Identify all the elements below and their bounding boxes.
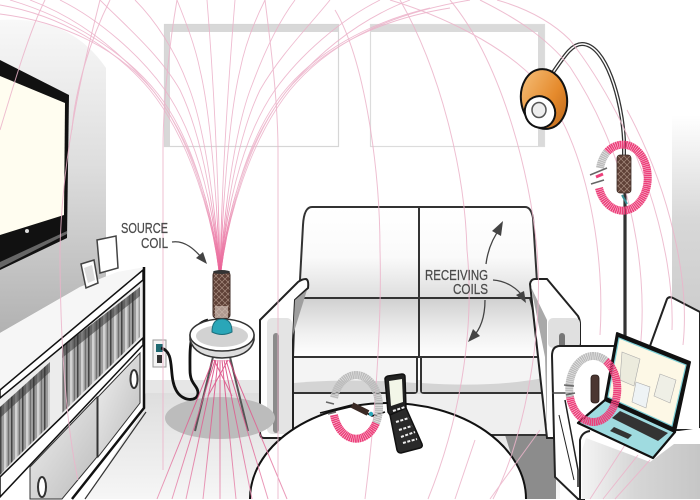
ring: lamp [590,145,648,211]
label: source coil: SOURCE [121,220,168,237]
books: upper right [62,287,140,413]
shelf front band [0,338,143,497]
armchair back [650,297,700,430]
arrows: receiving coils [468,221,526,342]
upper fan: left [0,0,220,280]
ring: phone [326,375,379,439]
floor [70,380,596,499]
shelf interior [0,280,143,477]
label: source coil [121,220,168,252]
lower fan [157,360,287,499]
outlet [153,340,166,367]
books: lower left [0,362,50,475]
lamp pole and arc [552,44,625,346]
left wall shading [0,20,106,340]
sliding door: left [30,397,97,499]
flip phone [385,374,422,453]
shelf top surface [0,267,145,392]
sliding door: right [98,353,140,457]
sofa right arm [530,279,580,438]
window: left [164,24,339,147]
television [0,60,69,270]
armchair arm [552,346,615,499]
laptop base [578,400,675,458]
power cord [161,320,208,399]
window: right [370,24,545,147]
sofa left arm [260,279,308,438]
arrow: source coil [172,242,207,264]
armchair [552,297,700,499]
sofa [260,207,580,438]
bookshelf [0,267,146,499]
label: receiving coils [425,267,488,298]
right wall shading [672,115,700,345]
lamp coil [617,155,631,204]
laptop coil [591,375,599,403]
sofa seat cushions [293,298,546,435]
side table shadow [165,397,275,439]
side table legs [195,357,248,431]
upper fan: right [220,0,470,280]
laptop windows [620,352,676,408]
source coil [213,270,230,318]
label: receiving coils: RECEIVING [425,267,488,284]
side table top [190,319,254,358]
ring: laptop [564,356,617,422]
phone coil and lead [320,405,385,416]
laptop [578,333,690,458]
armchair seat [580,428,700,499]
base dome [212,319,232,334]
sofa back [299,207,538,298]
coffee table [250,403,526,499]
laptop screen [605,333,690,432]
picture frames [81,236,118,288]
label: receiving coils: COILS [453,281,488,298]
label: source coil: COIL [141,235,168,252]
lamp head [517,66,571,133]
